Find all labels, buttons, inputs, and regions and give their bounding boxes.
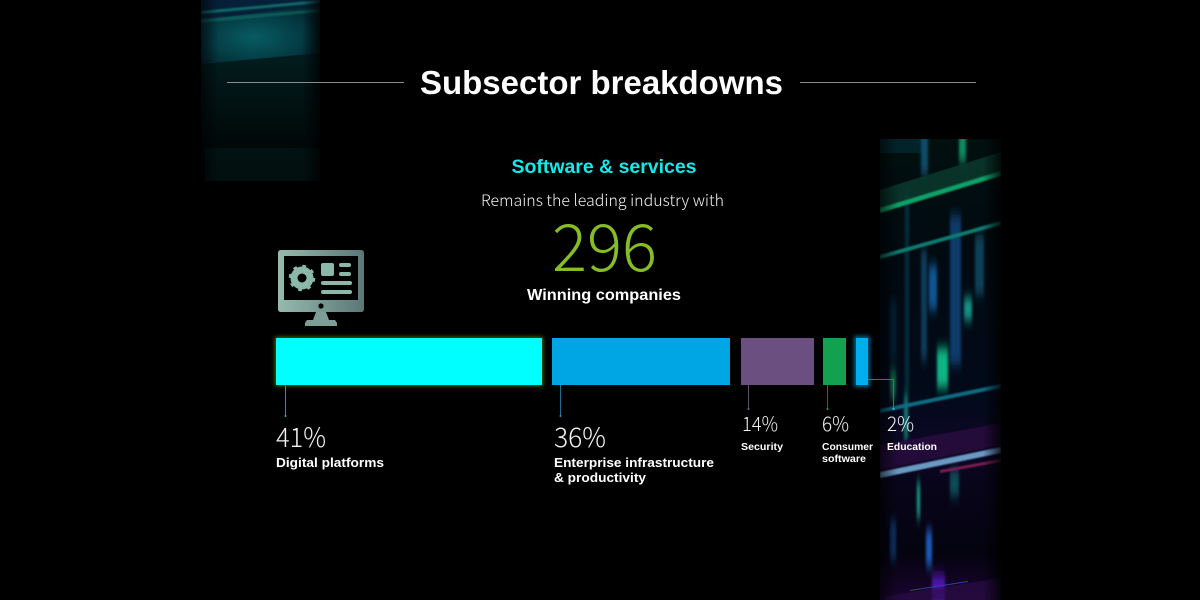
bar: consumer software 6% bbox=[823, 338, 846, 385]
subheading: Software & services bbox=[512, 157, 696, 178]
bar: education 2% bbox=[854, 336, 870, 387]
label: 36% enterprise infrastructure & productivity bbox=[554, 416, 714, 485]
leader line: 14% bbox=[748, 385, 750, 410]
label: 36% enterprise infrastructure & productivity: & productivity bbox=[554, 470, 647, 485]
label: 2% education: Education bbox=[887, 442, 937, 453]
bar: security 14% bbox=[741, 338, 814, 385]
caption: winning companies: Winning companies bbox=[527, 287, 681, 304]
leader line: 6% bbox=[826, 385, 828, 410]
label: 36% enterprise infrastructure & productivity: 36% bbox=[554, 416, 606, 455]
leader line: 36% bbox=[560, 385, 562, 417]
label: 41% digital platforms bbox=[276, 416, 384, 470]
bar: enterprise infrastructure 36% bbox=[552, 338, 730, 385]
leader line: 41% bbox=[284, 385, 286, 417]
intro text: Remains the leading industry with bbox=[481, 187, 724, 211]
label: 6% consumer software bbox=[822, 408, 873, 465]
label: 6% consumer software: 6% bbox=[822, 408, 849, 437]
decorative image strip: right bbox=[880, 130, 1001, 600]
label: 41% digital platforms: 41% bbox=[276, 416, 326, 455]
label: 6% consumer software: software bbox=[822, 454, 866, 465]
label: 2% education: 2% bbox=[887, 408, 914, 437]
label: 41% digital platforms: Digital platforms bbox=[276, 455, 384, 470]
label: 14% security bbox=[741, 408, 783, 453]
label: 14% security: Security bbox=[741, 442, 783, 453]
title: Subsector breakdowns bbox=[420, 64, 783, 101]
label: 36% enterprise infrastructure & productivity: Enterprise infrastructure bbox=[554, 455, 714, 470]
leader line: 2% bbox=[868, 380, 895, 410]
big number: 296 bbox=[552, 196, 657, 290]
decorative image strip: top left bbox=[201, 0, 320, 181]
icon: monitor with gear bbox=[278, 250, 364, 326]
title rule: left bbox=[227, 82, 404, 84]
label: 6% consumer software: Consumer bbox=[822, 442, 873, 453]
bar chart: subsector shares bbox=[275, 336, 870, 387]
bar: digital platforms 41% bbox=[275, 337, 543, 386]
label: 2% education bbox=[887, 408, 937, 453]
label: 14% security: 14% bbox=[742, 408, 778, 437]
title rule: right bbox=[800, 82, 976, 84]
